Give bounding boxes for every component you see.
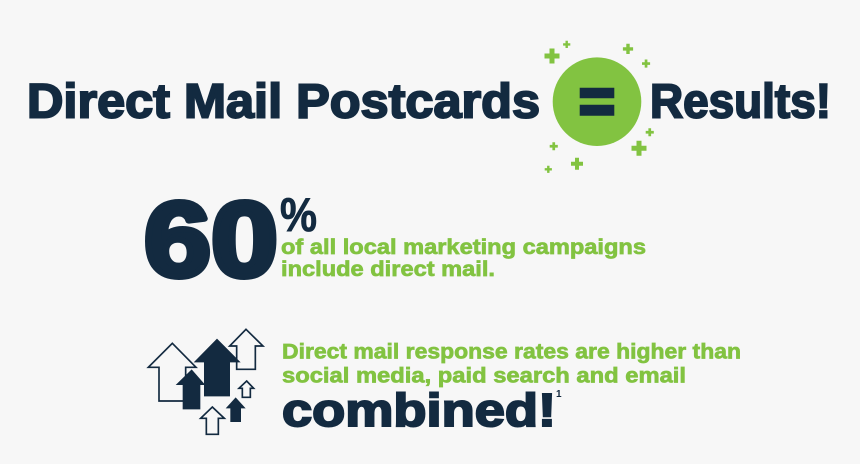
filled arrows [176, 339, 246, 422]
hollow arrows [148, 329, 263, 434]
title: right text: Results! [650, 75, 831, 129]
percent sign: % [280, 188, 317, 241]
stat text: response rates [282, 340, 741, 388]
stat text: local marketing campaigns: of all local marketing campaigns [281, 236, 646, 259]
icon: equals badge with plus signs [544, 41, 654, 173]
equals sign [580, 88, 614, 116]
icon: upward arrows [148, 329, 263, 434]
title [27, 75, 831, 129]
stat text: response rates: Direct mail response rates are higher than [282, 340, 741, 364]
stat text: response rates: social media, paid search and email [282, 364, 686, 388]
emphasis word: combined!: combined! [282, 384, 556, 436]
title: left text: Direct Mail Postcards [27, 75, 540, 129]
number 60: 60 [144, 181, 278, 299]
plus signs [544, 41, 654, 173]
stat text: local marketing campaigns: include direct mail. [281, 258, 495, 281]
stat text: local marketing campaigns [281, 236, 646, 281]
big number: 60% [144, 181, 317, 299]
green circle [553, 57, 641, 146]
footnote marker: 1 [556, 389, 562, 400]
